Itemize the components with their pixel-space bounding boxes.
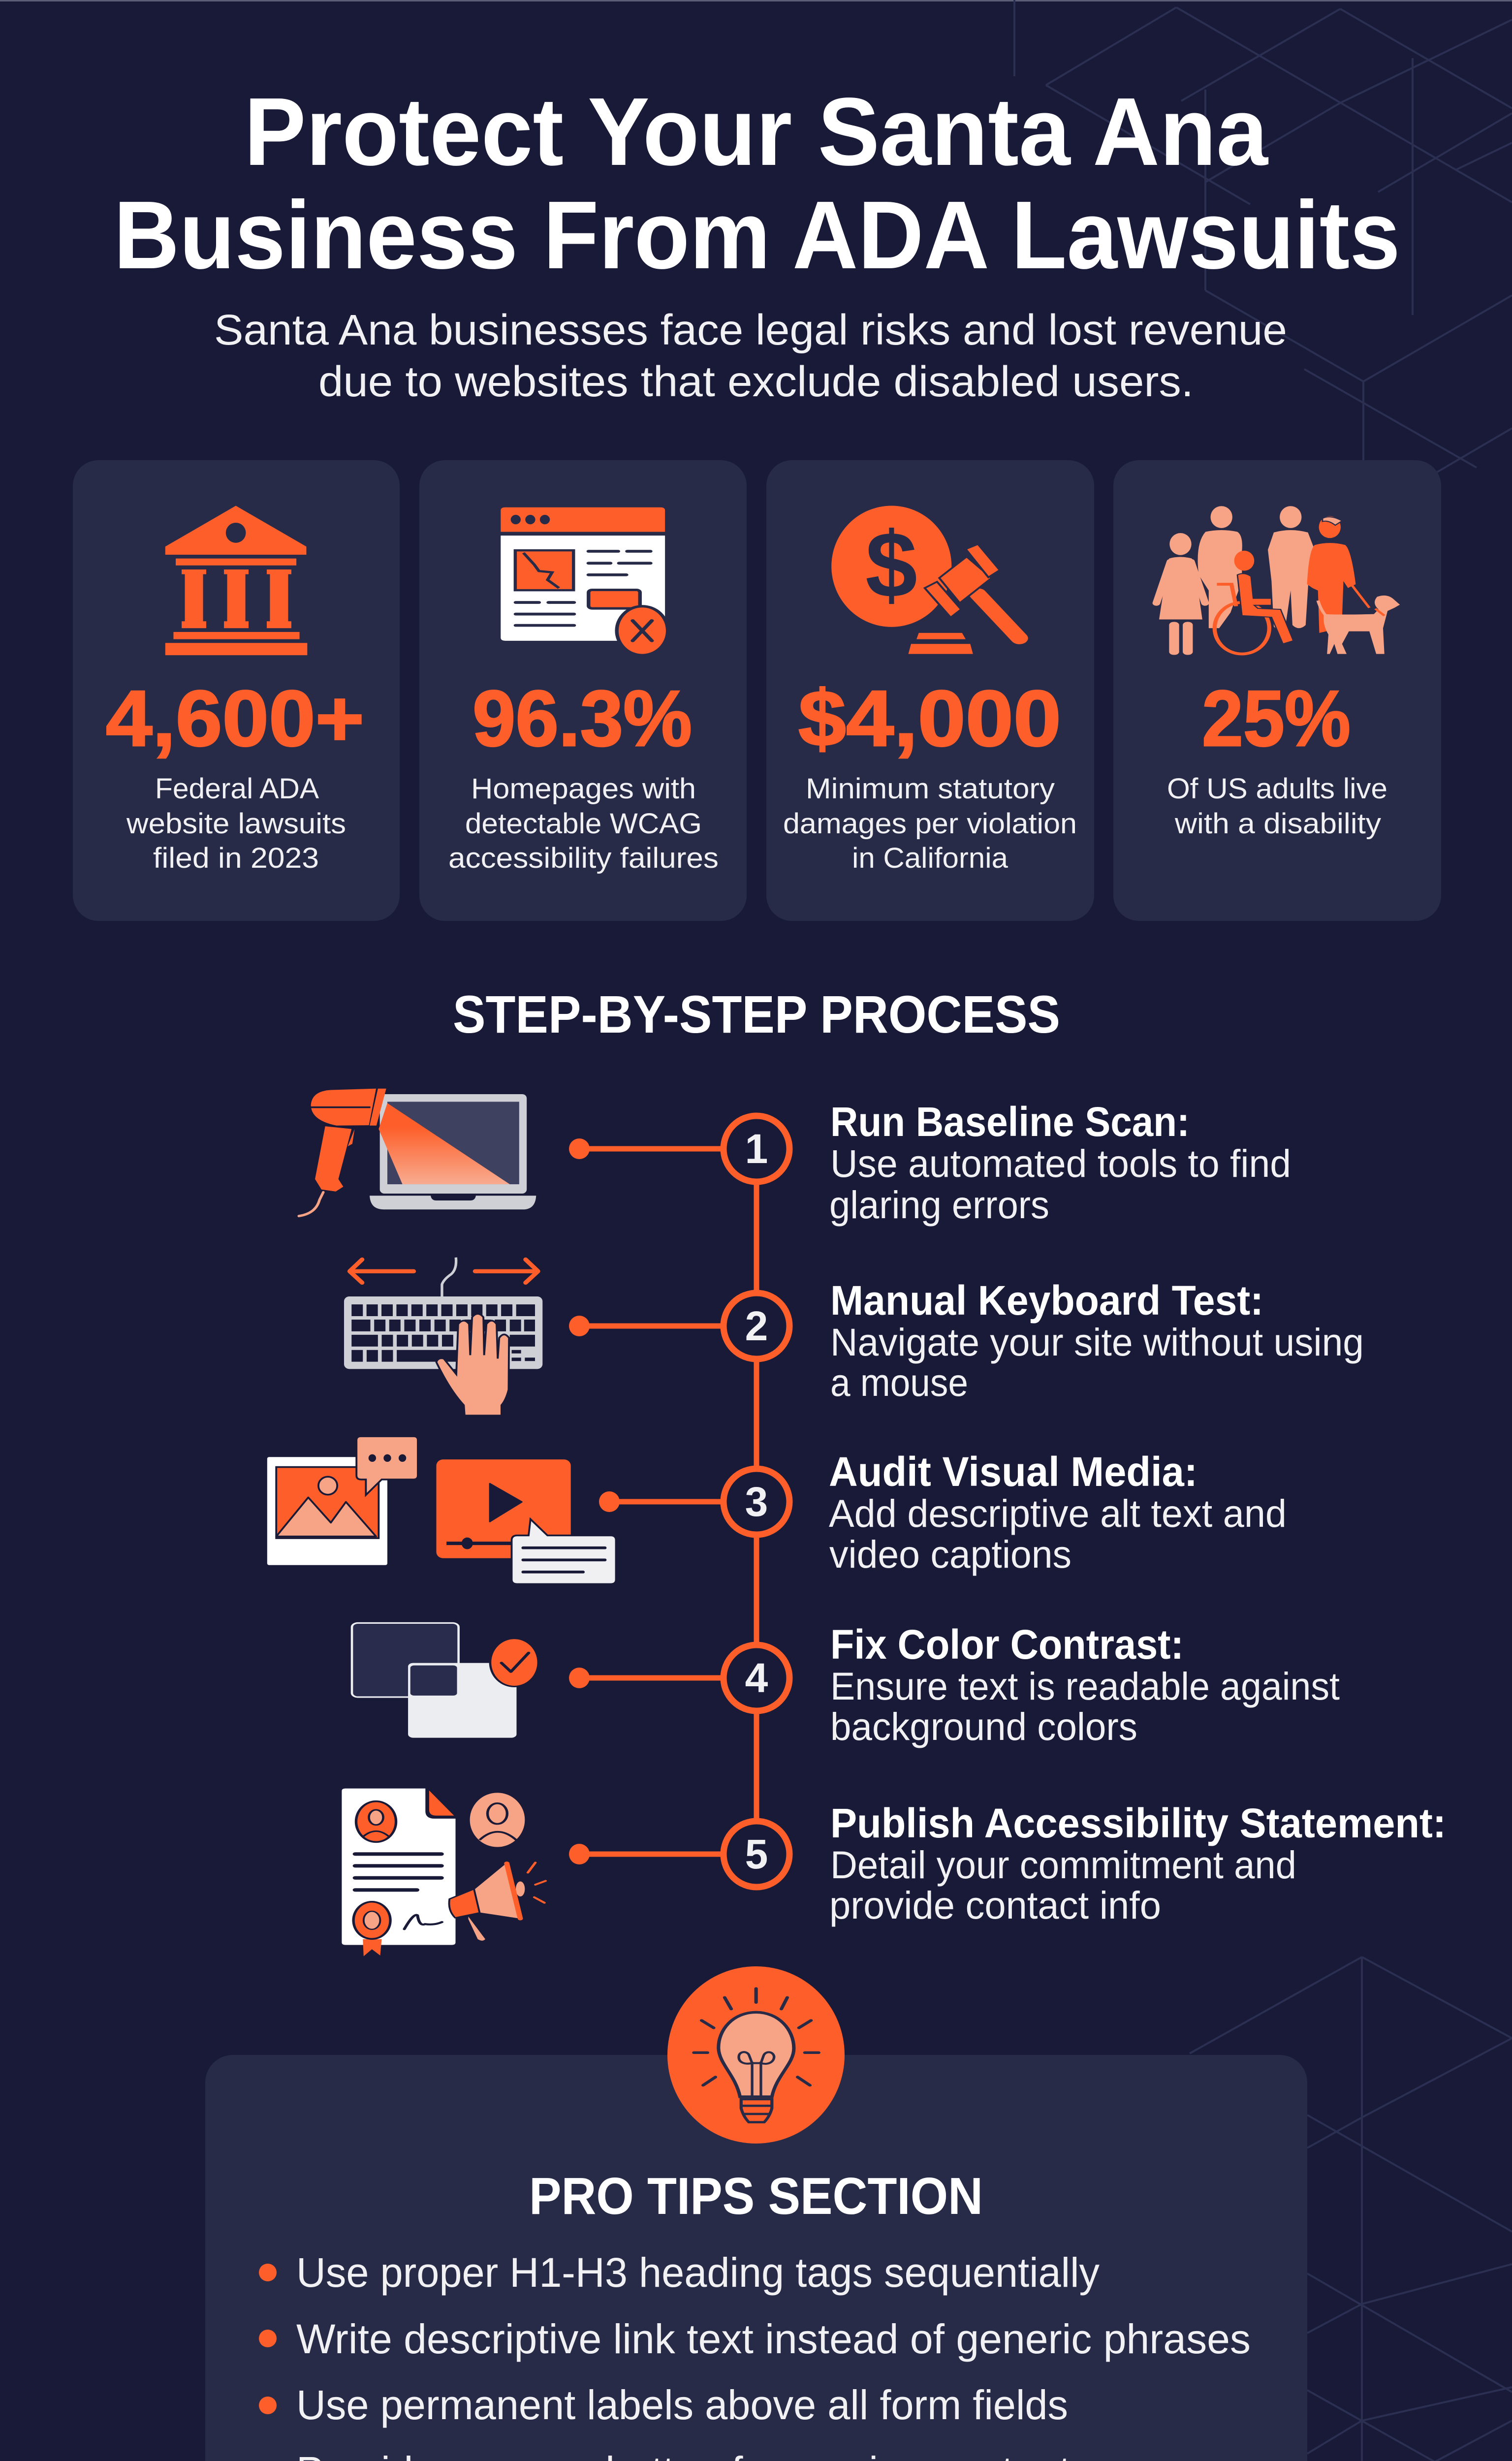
timeline: 5	[745, 1831, 768, 1877]
title: Business From ADA Lawsuits	[114, 181, 1400, 289]
icon: keyboard and hand	[344, 1258, 542, 1416]
timeline	[569, 1116, 789, 1887]
stat label: lawsuits: filed in 2023	[153, 842, 319, 874]
stat: 4,600+: 4,600+	[106, 674, 364, 763]
timeline: 4	[745, 1655, 768, 1701]
step 3 text: video captions	[829, 1532, 1071, 1576]
stat label: damages: in California	[852, 842, 1008, 874]
stat label: lawsuits: Federal ADA	[155, 773, 319, 805]
stat label: lawsuits: website lawsuits	[126, 808, 346, 840]
stat label: disability	[1167, 773, 1387, 840]
step 5 text	[829, 1800, 1446, 1927]
step 1 text: Run Baseline Scan:	[830, 1099, 1190, 1145]
step 3 text: Audit Visual Media:	[829, 1449, 1197, 1495]
stat label: disability: with a disability	[1174, 808, 1381, 840]
stat label: homepages: Homepages with	[471, 773, 696, 805]
icon: light bulb	[667, 1966, 845, 2144]
stat label: damages: damages per violation	[783, 808, 1077, 840]
heading: pro tips: PRO TIPS SECTION	[529, 2167, 983, 2225]
icon: accessibility statement document and megaphone	[342, 1789, 545, 1956]
step 2 text: a mouse	[830, 1360, 968, 1404]
stat label: homepages: detectable WCAG	[465, 808, 702, 840]
icon: image and video media	[267, 1436, 616, 1584]
step 1 text: glaring errors	[829, 1183, 1049, 1227]
icon: broken web page	[501, 507, 668, 655]
step 3 text: Add descriptive alt text and	[829, 1491, 1287, 1535]
step 4 text: background colors	[830, 1704, 1137, 1748]
timeline: 2	[745, 1303, 768, 1349]
panel: stat card disability	[1113, 460, 1441, 921]
tip 2: Write descriptive link text instead of generic phrases	[296, 2316, 1251, 2362]
step 2 text: Manual Keyboard Test:	[830, 1277, 1263, 1324]
panel: stat card lawsuits	[73, 460, 400, 921]
stat label: lawsuits	[126, 773, 346, 874]
step 4 text	[830, 1621, 1340, 1748]
icon: dollar coin and gavel	[831, 506, 1019, 654]
stat label: damages	[783, 773, 1077, 874]
title: Protect Your Santa Ana	[244, 78, 1269, 186]
step 4 text: Ensure text is readable against	[830, 1664, 1340, 1708]
stat label: damages: Minimum statutory	[806, 773, 1055, 805]
step 2 text: Navigate your site without using	[830, 1320, 1364, 1364]
panel: stat card damages	[766, 460, 1094, 921]
icon: color contrast squares	[352, 1623, 538, 1738]
step 5 text: Publish Accessibility Statement:	[830, 1800, 1446, 1846]
step 5 text: provide contact info	[829, 1883, 1161, 1927]
step 1 text	[829, 1099, 1291, 1227]
heading: step-by-step process: STEP-BY-STEP PROCESS	[453, 984, 1060, 1044]
panel: stat card homepages	[419, 460, 747, 921]
tip 1: Use proper H1-H3 heading tags sequentially	[296, 2249, 1100, 2296]
stat: 25%: 25%	[1202, 674, 1351, 763]
timeline: 3	[745, 1479, 768, 1525]
subtitle: Santa Ana businesses face legal risks and lost revenue	[214, 306, 1287, 354]
title	[114, 78, 1400, 289]
panel: pro tips	[205, 1966, 1307, 2461]
step 4 text: Fix Color Contrast:	[830, 1621, 1184, 1668]
stat label: homepages	[448, 773, 719, 874]
timeline: 1	[745, 1126, 768, 1172]
stat: 96.3%: 96.3%	[472, 674, 692, 763]
stat label: homepages: accessibility failures	[448, 842, 719, 874]
step 3 text	[829, 1449, 1287, 1576]
step 5 text: Detail your commitment and	[830, 1843, 1296, 1887]
stat: $4,000: $4,000	[798, 674, 1061, 763]
icon: dollar coin and gavel: $	[865, 513, 917, 617]
subtitle: due to websites that exclude disabled users.	[318, 358, 1194, 406]
subtitle	[214, 306, 1287, 406]
step 1 text: Use automated tools to find	[830, 1141, 1291, 1185]
icon: courthouse	[165, 506, 307, 655]
stat label: disability: Of US adults live	[1167, 773, 1387, 805]
icon: group of people with wheelchair and service dog	[1156, 506, 1400, 655]
icon: barcode scanner and laptop	[299, 1089, 536, 1216]
step 2 text	[830, 1277, 1364, 1404]
tip 3: Use permanent labels above all form fields	[296, 2382, 1068, 2428]
